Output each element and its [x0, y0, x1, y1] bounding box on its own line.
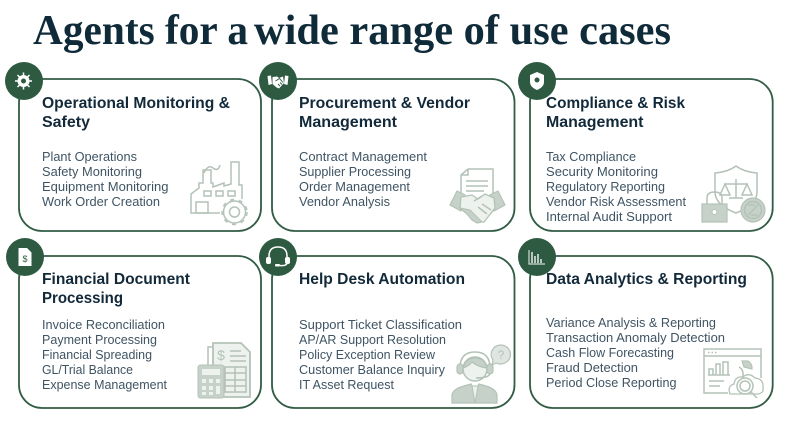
icon: calculator and spreadsheet: [198, 343, 250, 398]
heading: Compliance & Risk: [546, 95, 685, 112]
icon: analytics window with cloud and magnifier: [704, 349, 763, 398]
icon: shield, scales, lock and percent: [702, 166, 765, 222]
use case list: Policy Exception Review: [299, 347, 436, 362]
use case list: [42, 317, 167, 392]
icon: contract and handshake: [450, 169, 505, 223]
use case list: Customer Balance Inquiry: [299, 362, 445, 377]
icon: document badge: [6, 238, 44, 276]
use case list: Safety Monitoring: [42, 164, 142, 179]
icon: document badge: $: [22, 254, 28, 264]
icon: headset badge: [259, 238, 297, 276]
use case list: [546, 149, 686, 224]
panel: procurement and vendor management: [259, 62, 514, 231]
icon: factory and gear: [191, 162, 247, 224]
use case list: [546, 315, 725, 390]
use case list: Period Close Reporting: [546, 375, 676, 390]
panel: operational monitoring and safety: [5, 62, 261, 231]
heading: Processing: [42, 290, 123, 307]
heading: Financial Document: [42, 271, 190, 288]
heading: Data Analytics & Reporting: [546, 271, 747, 288]
icon: support agent with question bubble: ?: [498, 348, 505, 362]
heading: [546, 95, 685, 131]
use case list: GL/Trial Balance: [42, 362, 133, 377]
use case list: Expense Management: [42, 377, 167, 392]
use case list: Tax Compliance: [546, 149, 636, 164]
panel: help desk automation: [259, 238, 514, 408]
heading: Management: [299, 114, 397, 131]
use case list: Variance Analysis & Reporting: [546, 315, 716, 330]
icon: support agent with question bubble: [452, 345, 510, 403]
panel: financial document processing: [6, 238, 261, 408]
use case list: Contract Management: [299, 149, 427, 164]
heading: Operational Monitoring &: [42, 95, 230, 112]
use case list: Plant Operations: [42, 149, 137, 164]
title: wide range of use cases: [254, 8, 671, 54]
heading: Safety: [42, 114, 90, 131]
use case list: Order Management: [299, 179, 410, 194]
heading: [42, 95, 230, 131]
use case list: Security Monitoring: [546, 164, 658, 179]
use case list: Financial Spreading: [42, 347, 152, 362]
heading: [42, 271, 190, 307]
use case list: Equipment Monitoring: [42, 179, 168, 194]
icon: bar chart badge: [518, 238, 556, 276]
use case list: Vendor Analysis: [299, 194, 390, 209]
use case list: Work Order Creation: [42, 194, 160, 209]
use case list: [299, 149, 427, 209]
icon: handshake badge: [259, 62, 297, 100]
use case list: [42, 149, 168, 209]
use case list: IT Asset Request: [299, 377, 394, 392]
use case list: [299, 317, 462, 392]
heading: Help Desk Automation: [299, 271, 465, 288]
heading: [299, 95, 470, 131]
title: [33, 8, 671, 54]
use case list: Fraud Detection: [546, 360, 638, 375]
use case list: Transaction Anomaly Detection: [546, 330, 725, 345]
use case list: AP/AR Support Resolution: [299, 332, 446, 347]
use case list: Vendor Risk Assessment: [546, 194, 686, 209]
heading: Procurement & Vendor: [299, 95, 470, 112]
icon: gear badge: [5, 62, 43, 100]
use case list: Payment Processing: [42, 332, 157, 347]
use case list: Invoice Reconciliation: [42, 317, 165, 332]
icon: calculator and spreadsheet: $: [217, 347, 225, 363]
title: Agents for a: [33, 8, 248, 54]
use case list: Support Ticket Classification: [299, 317, 462, 332]
heading: Management: [546, 114, 644, 131]
icon: shield badge: [518, 62, 556, 100]
panel: compliance and risk management: [518, 62, 773, 231]
use case list: Internal Audit Support: [546, 209, 672, 224]
use case list: Supplier Processing: [299, 164, 411, 179]
panel: data analytics and reporting: [518, 238, 773, 408]
use case list: Regulatory Reporting: [546, 179, 665, 194]
use case list: Cash Flow Forecasting: [546, 345, 674, 360]
